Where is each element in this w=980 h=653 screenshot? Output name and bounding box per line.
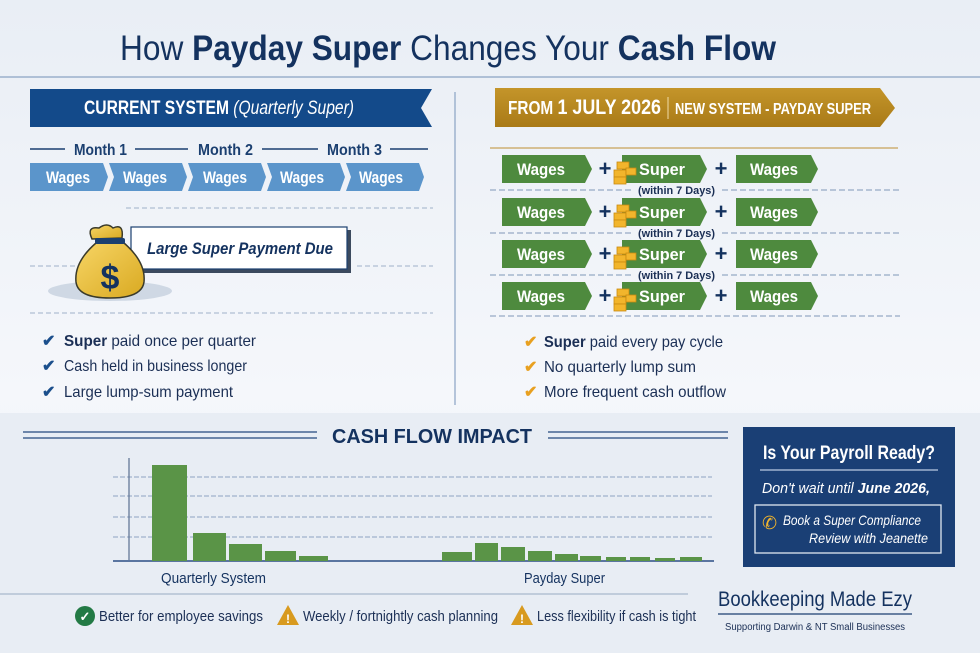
payroll rows: + [599, 156, 611, 181]
checklist: payday: More frequent cash outflow [544, 384, 726, 401]
bar chart [113, 458, 714, 587]
payroll rows: Wages [750, 160, 798, 179]
brand: Supporting Darwin & NT Small Businesses [725, 622, 905, 633]
icon: money bag: $ [101, 259, 120, 297]
callout: is your payroll ready [743, 427, 955, 567]
checklist: current: Super paid once per quarter [64, 333, 257, 350]
panel: payday super [490, 88, 900, 401]
payroll rows: (within 7 Days) [638, 270, 715, 282]
wages chevrons: Wages [280, 168, 324, 187]
wages chevrons: Wages [123, 168, 167, 187]
benefits row [75, 605, 697, 626]
wages chevrons: Wages [359, 168, 403, 187]
checklist: payday: No quarterly lump sum [544, 359, 696, 376]
checklist: payday: ✔ [524, 359, 537, 376]
callout: is your payroll ready: ✆ [762, 513, 777, 533]
icon: money bag [48, 225, 172, 301]
benefits row: ✓ [80, 609, 90, 624]
benefits row: Better for employee savings [99, 608, 263, 625]
checklist: current: Large lump-sum payment [64, 384, 234, 401]
month timeline: Month 1 [74, 142, 127, 159]
benefits row: Weekly / fortnightly cash planning [303, 608, 498, 625]
wages chevrons [30, 163, 424, 191]
payroll rows [502, 155, 818, 311]
benefits row: ! [286, 612, 290, 626]
wages chevrons: Wages [46, 168, 90, 187]
payroll rows: Wages [517, 160, 565, 179]
bar chart: Quarterly System [161, 570, 266, 587]
callout: large super payment due [131, 227, 351, 273]
checklist: payday: Super paid every pay cycle [544, 334, 723, 351]
panel: current system [30, 89, 433, 401]
month timeline [30, 142, 428, 159]
callout: large super payment due: Large Super Payment Due [147, 239, 333, 258]
banner: current system [30, 89, 432, 127]
brand: Bookkeeping Made Ezy [718, 588, 912, 611]
month timeline: Month 3 [327, 142, 382, 159]
payroll rows: Super [639, 160, 685, 179]
checklist: current [42, 333, 257, 401]
brand [718, 588, 912, 633]
benefits row: ! [520, 612, 524, 626]
bar chart: Payday Super [524, 570, 605, 587]
title: How Payday Super Changes Your Cash Flow [120, 29, 777, 68]
checklist: current: Cash held in business longer [64, 358, 248, 375]
checklist: payday: ✔ [524, 334, 537, 351]
banner: new system [495, 88, 895, 127]
callout: is your payroll ready: Review with Jeanette [809, 530, 928, 546]
benefits row: Less flexibility if cash is tight [537, 608, 697, 625]
month timeline: Month 2 [198, 142, 253, 159]
checklist: payday: ✔ [524, 384, 537, 401]
callout: is your payroll ready: Book a Super Compliance [783, 512, 921, 528]
checklist: payday [524, 334, 726, 401]
heading: cash flow impact: CASH FLOW IMPACT [332, 426, 532, 448]
checklist: current: ✔ [42, 358, 55, 375]
payroll rows: + [715, 156, 727, 181]
checklist: current: ✔ [42, 333, 55, 350]
checklist: current: ✔ [42, 384, 55, 401]
payroll rows: (within 7 Days) [638, 185, 715, 197]
banner: current system: CURRENT SYSTEM (Quarterly Super) [84, 98, 354, 119]
callout: is your payroll ready: Don't wait until June 2026, [762, 480, 930, 497]
wages chevrons: Wages [203, 168, 247, 187]
payroll rows: (within 7 Days) [638, 228, 715, 240]
banner: new system: NEW SYSTEM - PAYDAY SUPER [675, 101, 871, 118]
callout: is your payroll ready: Is Your Payroll Ready? [763, 443, 935, 464]
banner: new system: FROM 1 JULY 2026 [508, 96, 661, 119]
